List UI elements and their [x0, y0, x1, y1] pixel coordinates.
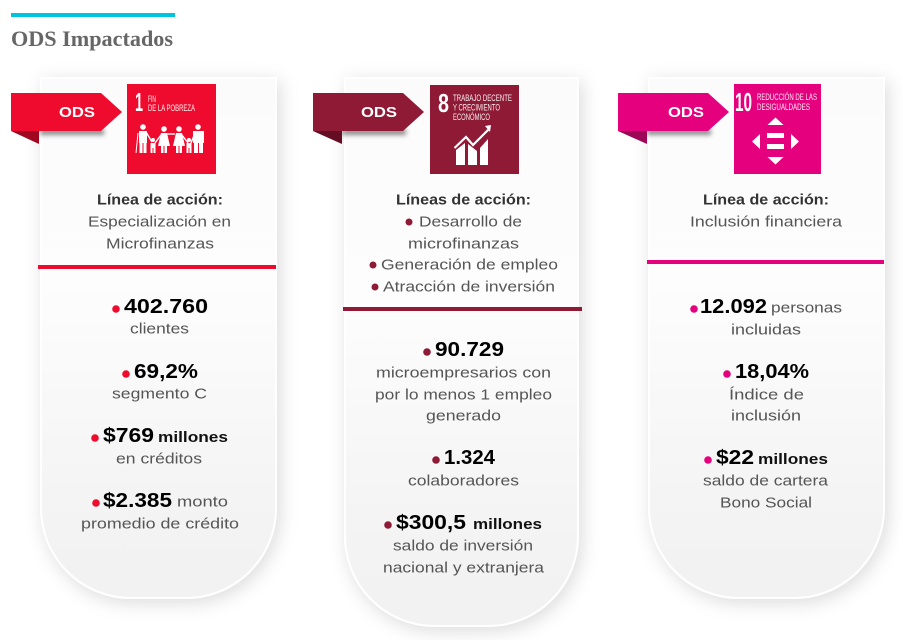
- stat: bono social: Bono Social: [720, 494, 812, 511]
- stat: microempresarios: por lo menos 1 empleo: [375, 386, 552, 403]
- text: líneas de acción 8: microfinanzas: [408, 235, 519, 252]
- stat: segmento C: 69,2%: [134, 361, 198, 383]
- icon: SDG 1 no poverty: DE LA POBREZA: [148, 103, 195, 114]
- text: línea de acción 1: [88, 192, 231, 252]
- icon: SDG 10 reduced inequalities: DESIGUALDADES: [757, 102, 810, 113]
- ribbon: ODS 1: [11, 93, 122, 144]
- icon: SDG 8 decent work: [430, 85, 519, 174]
- title: ODS Impactados: [11, 26, 173, 51]
- text: líneas de acción 8: Líneas de acción:: [396, 192, 531, 208]
- icon: SDG 8 decent work: TRABAJO DECENTE: [453, 93, 512, 104]
- card background 10: [649, 78, 884, 598]
- icon: SDG 8 decent work: 8: [438, 88, 449, 118]
- icon: SDG 8 decent work: Y CRECIMIENTO: [453, 102, 500, 114]
- icon: SDG 1 no poverty: [127, 84, 216, 174]
- stat: microempresarios: [375, 339, 552, 424]
- text: línea de acción 10: [690, 192, 843, 230]
- stat: personas incluidas: 12.092: [700, 296, 767, 318]
- stat: créditos: en créditos: [116, 450, 202, 467]
- stat: inversión: nacional y extranjera: [383, 559, 545, 576]
- stat: inversión: [383, 512, 545, 576]
- panel: ODS 8: [313, 78, 582, 626]
- icon: SDG 10 reduced inequalities: REDUCCIÓN DE LAS: [757, 92, 817, 103]
- stat: personas incluidas: incluidas: [731, 321, 801, 338]
- text: líneas de acción 8: Generación de empleo: [381, 256, 558, 273]
- card background 1: [41, 78, 276, 598]
- stat: índice de inclusión: [723, 361, 809, 424]
- stat: índice de inclusión: 18,04%: [735, 361, 809, 383]
- stat: colaboradores: [408, 447, 519, 489]
- icon: SDG 10 reduced inequalities: [734, 84, 821, 174]
- icon: SDG 8 decent work: ECONÓMICO: [453, 112, 490, 123]
- text: línea de acción 10: Inclusión financiera: [690, 213, 843, 230]
- stat: clientes: 402.760: [124, 296, 208, 318]
- header accent bar: [11, 13, 175, 17]
- stat: segmento C: [112, 361, 207, 402]
- panel: ODS 10: [618, 78, 884, 598]
- ribbon: ODS 1: ODS: [59, 104, 95, 121]
- stat: créditos: millones: [158, 429, 228, 446]
- text: líneas de acción 8: [370, 192, 558, 295]
- stat: personas incluidas: [690, 296, 842, 338]
- panel: ODS 1: [11, 78, 276, 598]
- stat: bono social: [703, 447, 829, 511]
- stat: créditos: $769: [103, 425, 154, 447]
- stat: monto promedio: [81, 490, 239, 532]
- stat: índice de inclusión: inclusión: [731, 407, 801, 424]
- stat: microempresarios: 90.729: [435, 339, 504, 361]
- stat: segmento C: segmento C: [112, 385, 207, 402]
- stat: inversión: saldo de inversión: [393, 537, 533, 554]
- card background 8: [345, 78, 578, 626]
- stat: monto promedio: $2.385: [103, 490, 172, 512]
- text: línea de acción 1: Microfinanzas: [106, 235, 214, 252]
- stat: clientes: clientes: [130, 320, 189, 337]
- stat: bono social: millones: [758, 451, 828, 468]
- text: línea de acción 1: Línea de acción:: [97, 192, 223, 208]
- stat: inversión: $300,5: [396, 512, 466, 534]
- ribbon: ODS 10: ODS: [668, 104, 704, 121]
- stat: bono social: $22: [716, 447, 754, 469]
- stat: microempresarios: generado: [426, 407, 501, 424]
- ribbon: ODS 8: ODS: [361, 104, 397, 121]
- stat: clientes: [112, 296, 208, 337]
- text: líneas de acción 8: Atracción de inversión: [383, 278, 555, 295]
- stat: bono social: saldo de cartera: [703, 472, 829, 489]
- icon: SDG 1 no poverty: 1: [135, 87, 143, 117]
- stat: índice de inclusión: Índice de: [729, 386, 804, 403]
- stat: monto promedio: promedio de crédito: [81, 515, 239, 532]
- ribbon: ODS 8: [313, 93, 424, 144]
- text: líneas de acción 8: Desarrollo de: [419, 213, 522, 230]
- stat: inversión: millones: [473, 516, 542, 533]
- stat: personas incluidas: personas: [771, 299, 842, 316]
- icon: SDG 10 reduced inequalities: 10: [735, 87, 752, 117]
- text: línea de acción 10: Línea de acción:: [703, 192, 829, 208]
- stat: microempresarios: microempresarios con: [376, 364, 551, 381]
- stat: colaboradores: 1.324: [444, 447, 496, 469]
- icon: SDG 1 no poverty: FIN: [148, 94, 156, 105]
- stat: créditos: [91, 425, 228, 467]
- stat: colaboradores: colaboradores: [408, 472, 519, 489]
- stat: monto promedio: monto: [177, 493, 228, 510]
- ribbon: ODS 10: [618, 93, 729, 144]
- text: línea de acción 1: Especialización en: [88, 213, 231, 230]
